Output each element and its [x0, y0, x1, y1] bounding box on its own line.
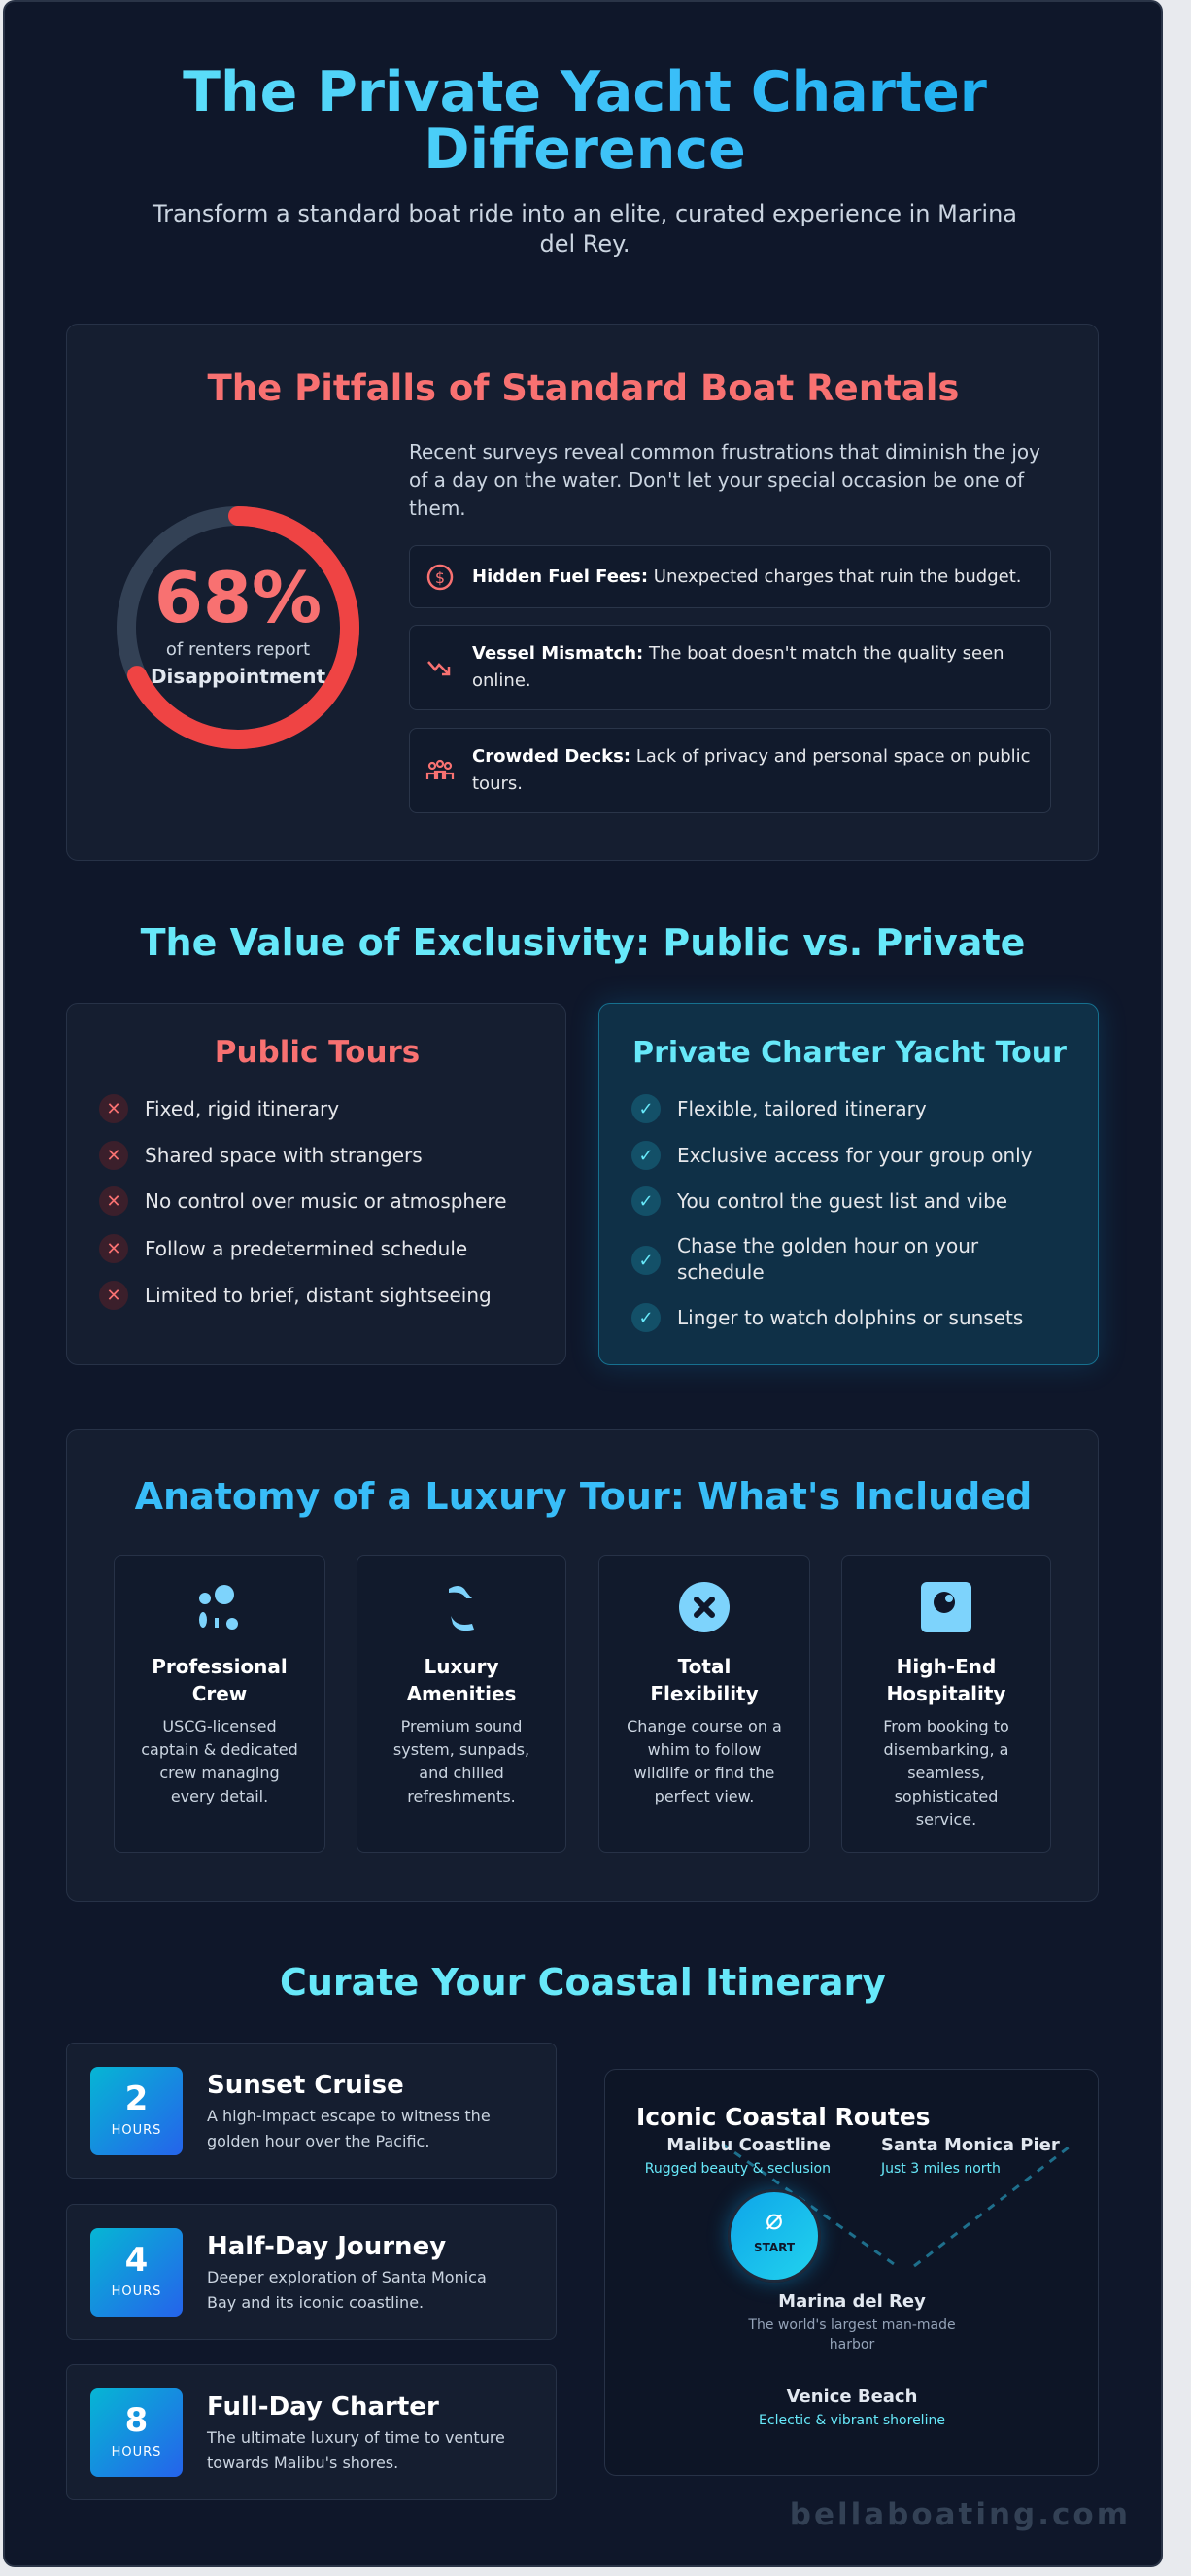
subtitle: Transform a standard boat ride into an elite, curated experience in Marina del Rey. — [153, 200, 1017, 258]
feature: crew: Professional — [152, 1655, 288, 1678]
itinerary: full-day: 8 — [125, 2401, 148, 2440]
feature: crew — [114, 1555, 325, 1853]
icon: start marker — [728, 2189, 821, 2283]
label: malibu — [645, 2135, 831, 2177]
feature: amenities: Amenities — [407, 1682, 516, 1705]
public list: ✕ — [106, 1098, 121, 1119]
feature: amenities: Premium sound system, sunpads, and chilled refreshments. — [393, 1717, 529, 1805]
label: venice beach: Eclectic & vibrant shoreline — [759, 2413, 945, 2428]
pitfalls heading: The Pitfalls of Standard Boat Rentals — [208, 367, 959, 409]
heading: value of exclusivity: The Value of Exclusivity: Public vs. Private — [141, 921, 1025, 964]
item: hidden fuel fees — [409, 545, 1051, 608]
donut chart: of renters report — [166, 639, 310, 660]
private list: ✓ — [638, 1145, 654, 1166]
private list: ✓ — [638, 1191, 654, 1211]
public list — [99, 1094, 507, 1310]
feature: hospitality — [841, 1555, 1051, 1853]
itinerary: sunset cruise: HOURS — [112, 2123, 161, 2138]
private heading: Private Charter Yacht Tour — [632, 1036, 1067, 1070]
label: venice beach — [759, 2387, 945, 2428]
label: marina del rey: The world's largest man-made harbor — [748, 2318, 956, 2353]
panel: private charter — [598, 1003, 1099, 1365]
item: hidden fuel fees: $ — [435, 567, 445, 587]
label: santa monica: Just 3 miles north — [881, 2161, 1001, 2177]
feature: hospitality: High-End — [897, 1655, 996, 1678]
private list: Flexible, tailored itinerary — [677, 1097, 927, 1120]
private list: ✓ — [638, 1250, 654, 1271]
watermark: bellaboating.com — [790, 2497, 1131, 2532]
feature: hospitality: From booking to disembarking, a seamless, sophisticated service. — [883, 1717, 1009, 1829]
public list: Shared space with strangers — [145, 1144, 423, 1167]
title: Difference — [424, 118, 746, 182]
item: hidden fuel fees: Hidden Fuel Fees: Unexpected charges that ruin the budget. — [472, 566, 1021, 587]
public list: ✕ — [106, 1238, 121, 1259]
dashed routes — [721, 2144, 1069, 2268]
feature: flexibility: Flexibility — [650, 1682, 759, 1705]
feature: flexibility — [598, 1555, 810, 1853]
itinerary: full-day: HOURS — [112, 2445, 161, 2459]
anatomy heading: Anatomy of a Luxury Tour: What's Included — [135, 1475, 1032, 1518]
itinerary: sunset cruise: 2 — [125, 2079, 148, 2118]
pitfalls intro: Recent surveys reveal common frustrations that diminish the joy of a day on the water. Don't let your special occasion be one of them. — [409, 440, 1040, 520]
panel: route map — [604, 2069, 1099, 2476]
feature: flexibility: Change course on a whim to follow wildlife or find the perfect view. — [627, 1717, 782, 1805]
panel: public tours — [66, 1003, 566, 1365]
itinerary: sunset cruise: A high-impact escape to witness the golden hour over the Pacific. — [207, 2107, 491, 2150]
donut chart — [117, 506, 359, 749]
feature: flexibility: Total — [678, 1655, 731, 1678]
public list: ✕ — [106, 1191, 121, 1211]
item: vessel mismatch: Vessel Mismatch: The boat doesn't match the quality seen online. — [472, 643, 1004, 691]
private list: ✓ — [638, 1308, 654, 1327]
public heading: Public Tours — [215, 1035, 420, 1070]
item: crowded decks: Crowded Decks: Lack of privacy and personal space on public tours. — [472, 746, 1031, 794]
icon: start marker: ⌀ — [766, 2203, 783, 2237]
private list: Chase the golden hour on your schedule — [677, 1234, 978, 1284]
panel: pitfalls — [66, 324, 1099, 861]
label: marina del rey: Marina del Rey — [778, 2291, 926, 2312]
label: marina del rey — [748, 2291, 956, 2353]
public list: ✕ — [106, 1145, 121, 1166]
itinerary: half-day: Deeper exploration of Santa Monica Bay and its iconic coastline. — [207, 2268, 487, 2312]
private list: Exclusive access for your group only — [677, 1144, 1033, 1167]
itinerary: half-day: Half-Day Journey — [207, 2232, 446, 2261]
label: venice beach: Venice Beach — [787, 2387, 917, 2407]
public list: Follow a predetermined schedule — [145, 1237, 467, 1260]
label: santa monica: Santa Monica Pier — [881, 2135, 1060, 2155]
itinerary: sunset cruise — [66, 2043, 557, 2179]
itinerary: half-day — [66, 2204, 557, 2340]
public list: No control over music or atmosphere — [145, 1189, 507, 1213]
feature: crew: USCG-licensed captain & dedicated crew managing every detail. — [141, 1717, 298, 1805]
public list: ✕ — [106, 1285, 121, 1306]
private list: ✓ — [638, 1098, 654, 1119]
label: malibu: Rugged beauty & seclusion — [645, 2161, 831, 2177]
public list: Fixed, rigid itinerary — [145, 1097, 339, 1120]
title: The Private Yacht Charter — [183, 60, 987, 124]
itinerary: full-day: The ultimate luxury of time to venture towards Malibu's shores. — [207, 2428, 505, 2472]
item: vessel mismatch — [409, 625, 1051, 710]
feature: amenities — [357, 1555, 566, 1853]
heading: itinerary: Curate Your Coastal Itinerary — [280, 1961, 886, 2004]
itinerary: half-day: HOURS — [112, 2284, 161, 2299]
itinerary: sunset cruise: Sunset Cruise — [207, 2071, 404, 2100]
donut chart: Disappointment — [151, 665, 325, 688]
map heading: Iconic Coastal Routes — [636, 2103, 931, 2131]
feature: amenities: Luxury — [424, 1655, 499, 1678]
panel: anatomy — [66, 1429, 1099, 1902]
title — [5, 64, 1165, 179]
private list: Linger to watch dolphins or sunsets — [677, 1306, 1023, 1329]
item: crowded decks — [409, 728, 1051, 813]
itinerary: full-day: Full-Day Charter — [207, 2392, 439, 2421]
public list: Limited to brief, distant sightseeing — [145, 1284, 492, 1307]
icon: start marker: START — [754, 2241, 795, 2254]
itinerary: half-day: 4 — [125, 2241, 148, 2280]
feature: crew: Crew — [192, 1682, 247, 1705]
private list: You control the guest list and vibe — [677, 1189, 1007, 1213]
label: malibu: Malibu Coastline — [666, 2135, 831, 2155]
private list — [631, 1094, 1033, 1332]
feature: hospitality: Hospitality — [887, 1682, 1005, 1705]
label: santa monica — [880, 2135, 1060, 2177]
itinerary: full-day — [66, 2364, 557, 2500]
donut chart: 68% — [154, 557, 322, 638]
